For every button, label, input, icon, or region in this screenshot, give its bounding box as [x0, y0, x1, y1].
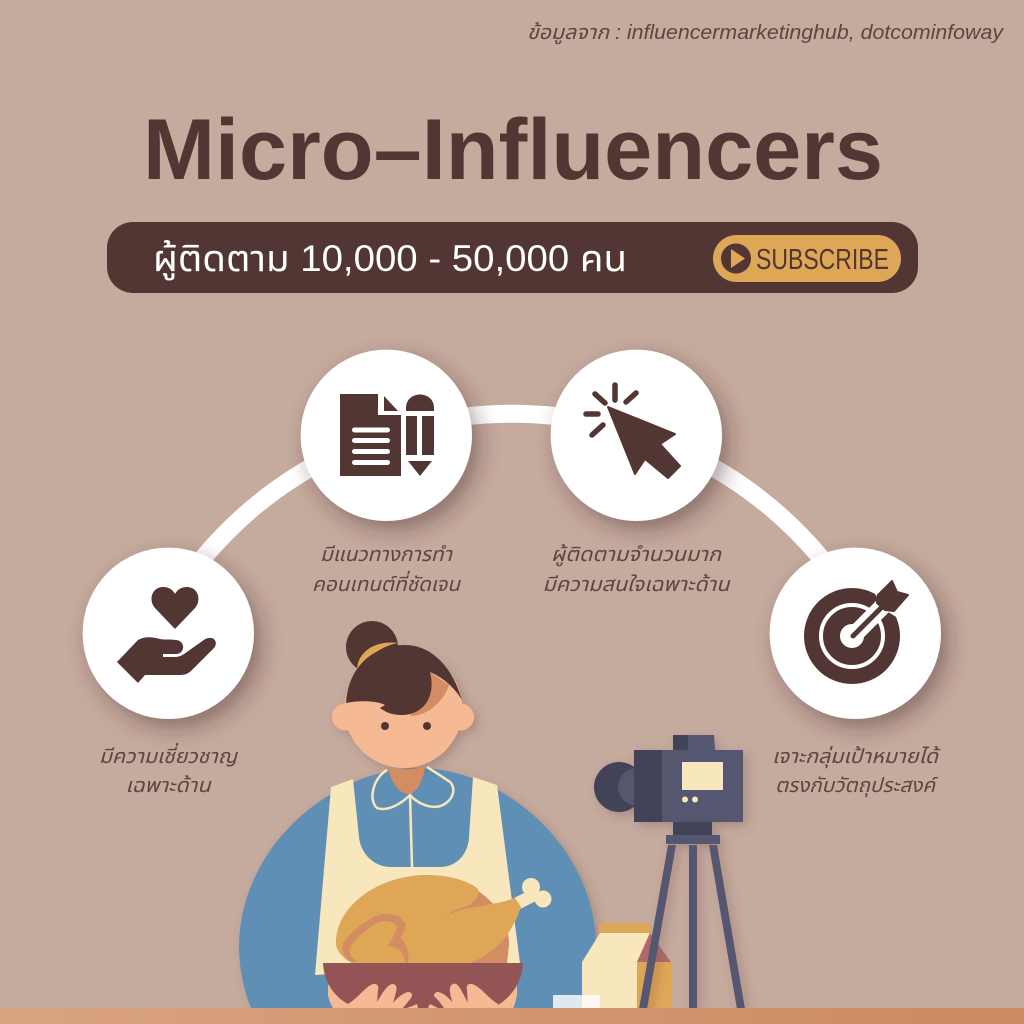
- icon: heart in hand: [117, 587, 216, 683]
- label: content: มีแนวทางการทำ: [320, 544, 453, 566]
- lens: [594, 762, 644, 812]
- hair band: [357, 643, 398, 669]
- collar: [372, 767, 453, 867]
- tripod: [639, 835, 745, 1009]
- chicken back: [336, 875, 509, 963]
- label: targeting: เจาะกลุ่มเป้าหมายได้: [772, 746, 941, 769]
- subscribe button: [713, 235, 901, 282]
- banner: follower range: [107, 222, 918, 293]
- label: targeting line 2: ตรงกับวัตถุประสงค์: [775, 775, 939, 798]
- title: Micro–Influencers: [143, 102, 883, 198]
- connecting arc: [203, 414, 821, 558]
- apron: [315, 777, 520, 975]
- icon: cursor click: [586, 385, 680, 478]
- source credit: ข้อมูลจาก : influencermarketinghub, dotcominfoway: [527, 22, 1004, 45]
- ears and face: [332, 650, 474, 768]
- fingers: [348, 984, 498, 1008]
- eyes: [381, 722, 389, 730]
- icon: target with arrow: [812, 575, 912, 676]
- illustration: carton: [553, 923, 672, 1008]
- circle: expertise: [83, 548, 254, 719]
- label: followers line 2: มีความสนใจเฉพาะด้าน: [542, 574, 731, 596]
- illustration: camera on tripod: [594, 735, 745, 1009]
- label: followers: ผู้ติดตามจำนวนมาก: [551, 544, 722, 567]
- illustration: cook character: [239, 621, 596, 1008]
- camera body: [634, 735, 743, 822]
- hands behind bowl: [328, 985, 517, 1008]
- hair: [346, 645, 462, 715]
- circle: engaged followers: [551, 350, 722, 521]
- bun: [346, 621, 398, 673]
- hair shadow: [410, 672, 449, 716]
- subscribe button: SUBSCRIBE: [756, 244, 889, 276]
- circle: content direction: [301, 350, 472, 521]
- head group: [332, 650, 474, 768]
- icon: document and pencil: [340, 394, 434, 476]
- body: [239, 768, 596, 1008]
- label: expertise: มีความเชี่ยวชาญ: [99, 742, 239, 768]
- chicken wing: [342, 914, 408, 963]
- label: expertise line 2: เฉพาะด้าน: [126, 775, 212, 797]
- banner text: ผู้ติดตาม 10,000 - 50,000 คน: [153, 238, 627, 281]
- label: content line 2: คอนเทนต์ที่ชัดเจน: [312, 570, 462, 596]
- chicken body: [336, 875, 479, 963]
- bowl: [323, 963, 523, 1008]
- chicken bone: [514, 878, 552, 909]
- chicken drumstick: [436, 898, 521, 963]
- neck: [388, 766, 425, 794]
- table top: [0, 1008, 1024, 1024]
- circle: targeting: [770, 548, 941, 719]
